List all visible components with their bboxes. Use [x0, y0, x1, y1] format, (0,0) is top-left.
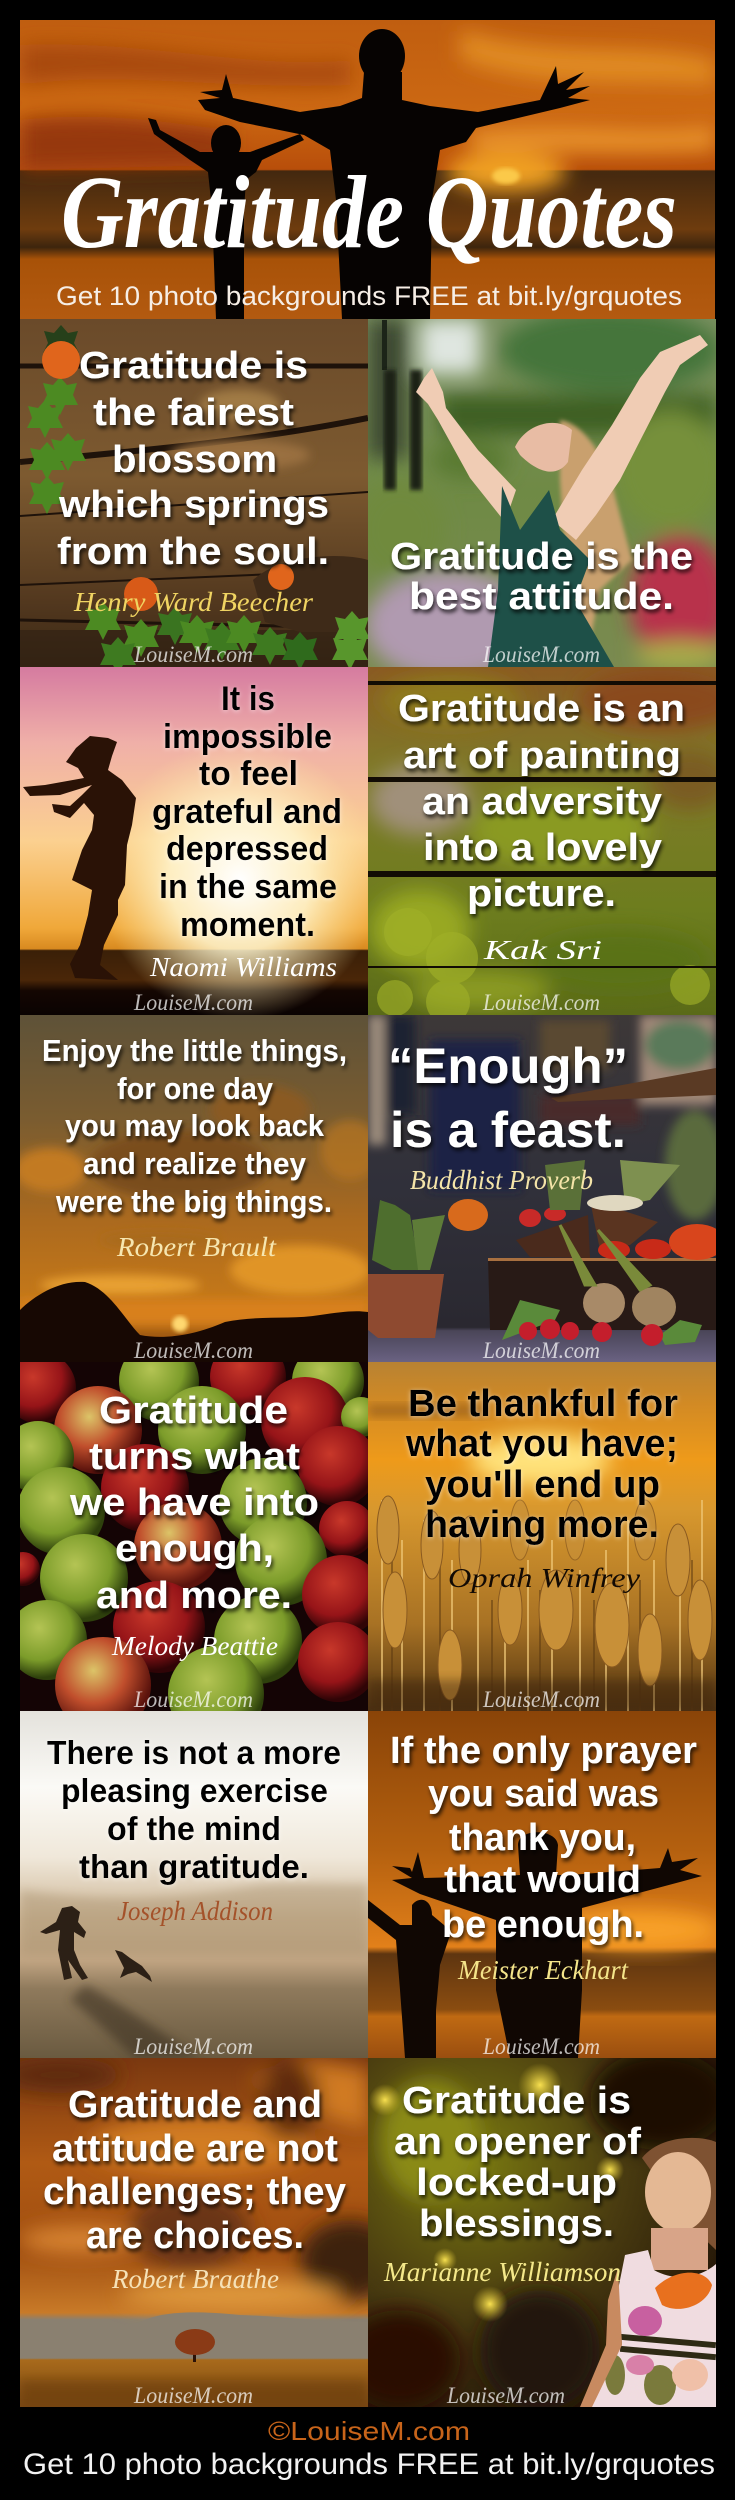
radishes	[502, 1300, 702, 1345]
quote text: from the soul.	[57, 531, 329, 573]
watermark: LouiseM.com	[482, 2034, 600, 2059]
quote text	[47, 1734, 341, 1885]
wooden slat	[551, 1068, 716, 1102]
quote text: we have into	[69, 1482, 319, 1524]
ivy leaves	[27, 325, 370, 675]
attribution: Henry Ward Beecher	[73, 587, 314, 617]
woman with raised arms	[416, 335, 708, 667]
quote text: Gratitude is	[79, 345, 308, 387]
silhouette: running woman	[40, 1906, 88, 1980]
quote text: than gratitude.	[79, 1848, 309, 1885]
wheat field background	[368, 1362, 716, 1711]
panel: Meister Eckhart quote	[368, 1711, 720, 2059]
quote text: having more.	[425, 1504, 659, 1546]
panel: Oprah Winfrey quote	[368, 1362, 716, 1712]
quote text: Gratitude	[99, 1390, 288, 1432]
flower pot	[368, 1274, 444, 1338]
quote text: and more.	[96, 1575, 292, 1617]
panel: Robert Braathe quote	[0, 2057, 400, 2408]
watermark: LouiseM.com	[482, 1687, 600, 1712]
panel: Henry Ward Beecher quote	[20, 319, 370, 675]
quote text: pleasing exercise	[61, 1772, 328, 1809]
quote text: for one day	[117, 1071, 274, 1106]
quote text: picture.	[467, 873, 616, 915]
header sunset photo	[20, 20, 715, 319]
attribution: Buddhist Proverb	[410, 1165, 593, 1195]
silhouette: man with arms open	[392, 1832, 702, 2058]
sunset clouds background	[20, 1015, 368, 1362]
silhouette: child with open arms	[148, 118, 304, 319]
silhouette: dog	[115, 1950, 152, 1982]
watermark: LouiseM.com	[133, 2034, 253, 2059]
attribution: Melody Beattie	[111, 1631, 278, 1661]
attribution: Meister Eckhart	[457, 1955, 629, 1985]
quote text	[405, 1383, 678, 1546]
panel: Buddhist Proverb quote	[368, 1015, 725, 1363]
quote text: that would	[444, 1859, 641, 1901]
panel: header banner	[20, 20, 715, 319]
footer link: Get 10 photo backgrounds FREE at bit.ly/grquotes	[23, 2448, 715, 2481]
quote text: be enough.	[442, 1904, 644, 1946]
watermark: LouiseM.com	[133, 642, 253, 667]
watermark: LouiseM.com	[446, 2383, 565, 2408]
quote text	[43, 2084, 346, 2257]
quote text: It is	[221, 680, 275, 718]
apples background	[20, 1362, 368, 1711]
cloud edge	[20, 2312, 368, 2333]
attribution: Naomi Williams	[149, 952, 337, 982]
greens	[372, 1160, 680, 1270]
lone tree	[175, 2329, 215, 2362]
quote text: grateful and	[152, 793, 342, 831]
quote text: to feel	[199, 755, 298, 793]
sunset background	[368, 1711, 716, 2058]
orange flowers	[42, 341, 80, 379]
basket	[253, 556, 368, 632]
quote text: of the mind	[107, 1810, 281, 1847]
quote text: you may look back	[65, 1108, 325, 1143]
quote text: Gratitude is	[402, 2080, 631, 2122]
panel: Kak Sri quote	[368, 667, 735, 1024]
shadow on the sand	[70, 1985, 200, 2058]
panel: Joseph Addison quote	[20, 1711, 368, 2059]
quote text: in the same	[159, 868, 337, 906]
quote text	[57, 345, 329, 573]
watermark: LouiseM.com	[133, 1338, 253, 1363]
quote text: Be thankful for	[408, 1383, 678, 1425]
attribution: Marianne Williamson	[383, 2257, 621, 2287]
quote text: turns what	[89, 1436, 300, 1478]
quote text	[394, 2080, 641, 2245]
arbor posts	[382, 320, 422, 490]
watermark: LouiseM.com	[482, 1338, 600, 1363]
footer credit: ©LouiseM.com	[268, 2416, 470, 2446]
quote text: an adversity	[422, 781, 662, 823]
quote text: and realize they	[83, 1146, 307, 1181]
stormy sky and field background	[20, 2058, 368, 2407]
garden background	[368, 319, 716, 667]
attribution: Kak Sri	[483, 935, 602, 965]
quote text: attitude are not	[52, 2128, 338, 2170]
quote text	[69, 1390, 319, 1617]
quote text	[388, 1038, 628, 1158]
foggy beach background	[20, 1711, 368, 2058]
subtitle: Get 10 photo backgrounds FREE at bit.ly/grquotes	[56, 281, 682, 311]
quote text: locked-up	[416, 2162, 617, 2204]
quote text	[42, 1033, 347, 1219]
quote text: what you have;	[405, 1423, 678, 1465]
wood background	[20, 319, 368, 667]
quote text	[390, 1730, 697, 1946]
panel: best attitude quote	[355, 308, 730, 680]
bowls	[516, 1215, 590, 1258]
panel: Melody Beattie quote	[2, 1339, 382, 1742]
quote text: is a feast.	[390, 1102, 626, 1158]
field texture	[20, 2380, 368, 2407]
quote text: into a lovely	[423, 827, 662, 869]
quote text: you said was	[428, 1773, 659, 1815]
quote text	[398, 688, 685, 915]
watermark: LouiseM.com	[133, 1687, 253, 1712]
attribution: Joseph Addison	[117, 1896, 273, 1926]
bokeh background	[368, 2058, 716, 2407]
quote text: an opener of	[394, 2121, 641, 2163]
watermark: LouiseM.com	[133, 990, 253, 1015]
girl	[580, 2138, 716, 2407]
silhouette: child	[368, 1900, 450, 2058]
quote text: impossible	[163, 718, 332, 756]
panel: Naomi Williams quote	[20, 667, 380, 1020]
quote text: blossom	[112, 439, 277, 481]
watermark: LouiseM.com	[482, 642, 600, 667]
tree line silhouette	[20, 1282, 368, 1362]
quote text: depressed	[166, 830, 328, 868]
panel: Robert Brault quote	[14, 1015, 380, 1363]
quote text	[152, 680, 342, 944]
quote text: Gratitude and	[68, 2084, 322, 2126]
quote text: Gratitude is an	[398, 688, 685, 730]
leaves and planks background	[368, 667, 716, 1015]
attribution: Oprah Winfrey	[448, 1563, 640, 1593]
attribution: Robert Braathe	[111, 2264, 279, 2294]
tomatoes	[448, 1199, 488, 1231]
panel: Marianne Williamson quote	[340, 2050, 730, 2410]
quote text: which springs	[58, 484, 329, 526]
quote text: thank you,	[449, 1817, 636, 1859]
vegetables background	[368, 1015, 716, 1362]
quote text	[390, 536, 693, 618]
quote text: blessings.	[419, 2203, 614, 2245]
quote text: If the only prayer	[390, 1730, 697, 1772]
quote text: challenges; they	[43, 2171, 346, 2213]
sunset pink background	[20, 667, 368, 1015]
quote text: are choices.	[86, 2215, 304, 2257]
quote text: Gratitude is the	[390, 536, 693, 578]
watermark: LouiseM.com	[133, 2383, 253, 2408]
silhouette: woman	[23, 736, 136, 980]
quote text: moment.	[180, 906, 315, 944]
quote text: “Enough”	[388, 1038, 628, 1094]
quote text: best attitude.	[409, 576, 674, 618]
quote text: the fairest	[93, 392, 294, 434]
quote text: were the big things.	[55, 1184, 332, 1219]
quote text: you'll end up	[425, 1464, 660, 1506]
attribution: Robert Brault	[116, 1232, 278, 1262]
quote text: There is not a more	[47, 1734, 341, 1771]
quote text: art of painting	[403, 735, 681, 777]
quote text: enough,	[115, 1528, 274, 1570]
crate	[488, 1258, 716, 1330]
turnips	[583, 1283, 625, 1323]
silhouette: man with open arms	[198, 29, 590, 319]
watermark: LouiseM.com	[482, 990, 600, 1015]
quote text: Enjoy the little things,	[42, 1033, 347, 1068]
